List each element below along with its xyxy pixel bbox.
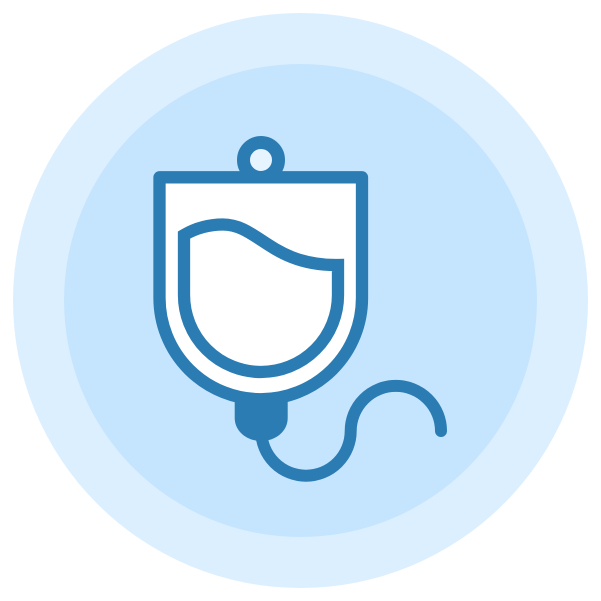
fluid level — [184, 224, 338, 372]
IV tube — [261, 386, 441, 476]
bag body — [160, 177, 362, 399]
icon: IV bag — [160, 142, 441, 476]
bag outlet — [235, 398, 288, 441]
inner circle — [64, 64, 537, 537]
hanger ring — [244, 142, 278, 178]
